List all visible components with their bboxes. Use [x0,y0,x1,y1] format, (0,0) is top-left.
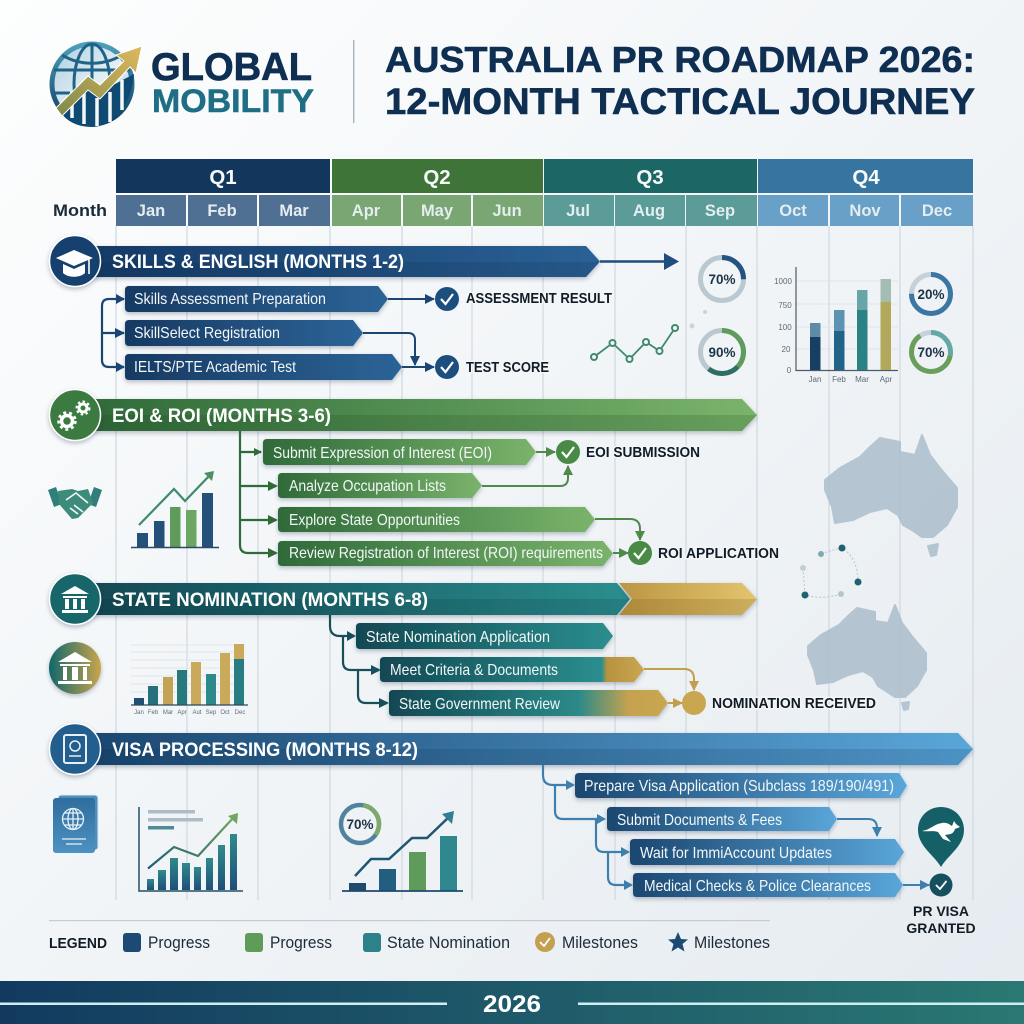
milestone: ROI Application: ROI APPLICATION [658,546,779,562]
milestone: Assessment Result [435,287,612,311]
months Q1: Feb [207,202,237,220]
task: State Government Review [389,690,668,716]
task: Wait for ImmiAccount Updates: Wait for ImmiAccount Updates [640,845,832,862]
months Q4: Nov [849,202,881,220]
logo: Global Mobility [52,44,314,127]
months Q3: Jul [566,202,590,220]
quarter: Q4 [758,159,973,193]
months Q3: Sep [705,202,735,220]
chart: monthly teal and gold bars: Oct [220,710,230,716]
months Q1 [116,195,330,226]
chart: monthly teal and gold bars [131,644,248,716]
arrow: registration to test score [363,333,415,365]
task: Prepare Visa Application [575,773,907,798]
icon: graduation cap [50,236,100,286]
map: Australia lower [808,605,926,710]
task: Submit Documents and Fees [607,807,837,831]
months Q2: Apr [352,202,381,220]
connector: State Nomination tree [330,615,387,703]
quarter: Q4: Q4 [852,166,880,189]
phase bar: Skills and English [85,246,679,277]
months Q2: Jun [492,202,522,220]
timeline header: quarters and months [53,159,973,226]
legend item: gold milestones: Milestones [562,934,638,952]
task: Prepare Visa Application: Prepare Visa Application (Subclass 189/190/491) [584,778,894,795]
task: Skills Assessment Preparation: Skills Assessment Preparation [134,291,326,308]
quarter: Q3: Q3 [636,166,664,189]
phase bar: State Nomination: STATE NOMINATION (MONTHS 6-8) [112,590,428,611]
phase bar: Visa Processing: VISA PROCESSING (MONTHS 8-12) [112,740,418,761]
arrow: occupation lists to submission [482,466,568,486]
milestone: EOI Submission: EOI SUBMISSION [586,445,700,461]
months Q3: Aug [633,202,665,220]
months Q1: Jan [137,202,165,220]
icon: gears [50,390,100,440]
title: AUSTRALIA PR ROADMAP 2026: [385,39,975,80]
chart: stacked bars Jan to Apr [774,267,898,384]
task: State Government Review: State Government Review [399,696,560,713]
icon: passport [53,795,98,853]
task: Submit Documents and Fees: Submit Documents & Fees [617,812,782,829]
phase bar: Visa Processing [85,733,973,765]
months Q4: Oct [779,202,807,220]
donut: 70%: 70% [708,272,736,287]
task: Review Registration of Interest: Review Registration of Interest (ROI) requirements [289,545,603,562]
donut: 20% [912,274,950,314]
months Q4: Dec [922,202,952,220]
chart: monthly teal and gold bars: Aut [192,710,202,716]
task: Submit Expression of Interest: Submit Expression of Interest (EOI) [273,445,492,462]
donut: 70%: 70% [346,817,374,832]
phase bar: State Nomination [85,583,630,615]
quarter: Q1: Q1 [209,166,237,189]
chart: stacked bars Jan to Apr: 20 [782,345,791,354]
task: Explore State Opportunities: Explore State Opportunities [289,512,460,529]
arrow: EOI to submission [536,451,555,453]
legend item: gold milestones [535,932,638,952]
donut: 70% teal and green [908,329,954,375]
legend item: navy progress: Progress [148,934,210,952]
phase bar: EOI and ROI: EOI & ROI (MONTHS 3-6) [112,406,331,427]
milestone: Nomination Received: NOMINATION RECEIVED [712,696,876,712]
milestone: PR Visa Granted: GRANTED [906,920,976,936]
footer band: 2026: 2026 [483,991,541,1018]
milestone: Nomination Received [682,691,876,715]
chart: stacked bars Jan to Apr: 100 [778,323,792,332]
quarter: Q3 [544,159,757,193]
arrowheads: bracket [116,294,125,372]
legend item: navy progress [123,933,210,952]
task: Skills Assessment Preparation [125,286,388,312]
chart: bars with rising line [139,807,243,891]
chart: monthly teal and gold bars: Apr [177,710,187,716]
chart: stacked bars Jan to Apr: 1000 [774,277,792,286]
dotted cycle [800,544,862,598]
months Q3 [544,195,757,226]
icon: government building [50,574,100,624]
chart: stacked bars Jan to Apr: 750 [778,301,792,310]
panel: Visa Processing [50,724,976,936]
panel: Skills and English [50,236,954,384]
arrowheads: Visa tree [566,780,633,890]
task: Wait for ImmiAccount Updates [630,839,904,865]
donut: 70% teal and green: 70% [917,345,945,360]
task: SkillSelect Registration [125,320,363,346]
wordmark: GLOBAL: GLOBAL [151,46,312,89]
milestone: EOI Submission [556,440,700,464]
donut: 90% [692,322,752,382]
quarter: Q2: Q2 [423,166,451,189]
arrow: assessment to result [388,298,434,300]
connector: Visa tree [543,765,631,885]
donut: 70% [700,258,744,300]
task: Submit Expression of Interest [263,439,536,465]
arrow: test to score [402,366,434,368]
panel: EOI and ROI [48,390,957,598]
connector: skills tasks bracket [102,299,124,367]
task: Medical Checks and Police Clearances: Medical Checks & Police Clearances [644,878,871,895]
chart: stacked bars Jan to Apr: Mar [855,375,869,384]
chart: stacked bars Jan to Apr: Feb [832,375,846,384]
chart: monthly teal and gold bars: Mar [163,710,173,716]
task: Explore State Opportunities [278,507,595,532]
arrow: state opportunities to ROI [595,519,640,540]
task: Meet Criteria and Documents [380,657,644,682]
icon: passport badge [50,724,100,774]
chart: growth bars with arrow [342,811,463,891]
arrow: criteria to nomination [644,669,694,690]
icon: government building gold [49,642,101,694]
wordmark: MOBILITY: MOBILITY [152,83,314,119]
task: IELTS/PTE Academic Test [125,354,402,380]
chart: stacked bars Jan to Apr: 0 [787,366,792,375]
arrow: medical checks to visa [903,884,929,886]
legend item: star milestones [668,932,770,952]
icon: handshake [48,487,102,519]
milestone: Test Score: TEST SCORE [466,360,549,376]
chart: monthly teal and gold bars: Jan [134,710,144,716]
legend item: green progress [245,933,332,952]
chart: monthly teal and gold bars: Feb [148,710,159,716]
title: 12-MONTH TACTICAL JOURNEY [385,81,975,122]
arrow: review to nomination [668,702,682,704]
chart: monthly teal and gold bars: Dec [235,710,245,716]
months Q1: Mar [279,202,309,220]
task: Analyze Occupation Lists [278,473,482,498]
chart: rising bars [131,471,219,548]
months Q2: May [421,202,454,220]
chart: monthly teal and gold bars: Sep [206,710,217,716]
arrow: documents to updates [837,819,877,836]
months Q4 [758,195,973,226]
task: IELTS/PTE Academic Test: IELTS/PTE Academic Test [134,359,296,376]
donut: 20%: 20% [917,287,945,302]
sparkline [591,310,707,362]
arrow: review to ROI [613,552,628,554]
legend item: state nomination: State Nomination [387,934,510,952]
row label: Month: Month [53,201,107,220]
milestone: Assessment Result: ASSESSMENT RESULT [466,291,612,307]
chart: stacked bars Jan to Apr: Apr [880,375,893,384]
milestone: PR Visa Granted [906,874,976,936]
milestone: Test Score [435,355,549,379]
quarter: Q1 [116,159,330,193]
footer band: 2026 [0,981,1024,1024]
connector: EOI tree [240,431,276,553]
phase bar: Skills and English: SKILLS & ENGLISH (MONTHS 1-2) [112,252,404,273]
milestone: ROI Application [628,541,779,565]
donut: 70% [338,802,382,846]
chart: stacked bars Jan to Apr: Jan [809,375,821,384]
icon: globe with rising arrow [52,44,142,127]
task: Medical Checks and Police Clearances [633,873,903,897]
phase bar: EOI and ROI [85,399,757,431]
task: SkillSelect Registration: SkillSelect Registration [134,325,280,342]
map: Australia upper [825,435,957,556]
milestone: PR Visa Granted: PR VISA [913,903,969,919]
arrowheads: State Nomination tree [347,631,389,708]
legend item: star milestones: Milestones [694,934,770,952]
legend title: LEGEND [49,936,107,952]
task: Analyze Occupation Lists: Analyze Occupation Lists [289,478,446,495]
arrowheads: EOI tree [254,448,278,558]
icon: kangaroo map pin [918,807,964,867]
task: Review Registration of Interest [278,541,613,566]
title [385,39,975,122]
legend item: green progress: Progress [270,934,332,952]
legend [49,932,770,952]
phase bar: gold extension [619,583,757,615]
panel: State Nomination [49,574,926,716]
task: State Nomination Application [356,623,613,649]
quarter: Q2 [332,159,543,193]
months Q2 [332,195,543,226]
task: Meet Criteria and Documents: Meet Criteria & Documents [390,662,558,679]
donut: 90%: 90% [708,345,736,360]
task: State Nomination Application: State Nomination Application [366,629,550,646]
